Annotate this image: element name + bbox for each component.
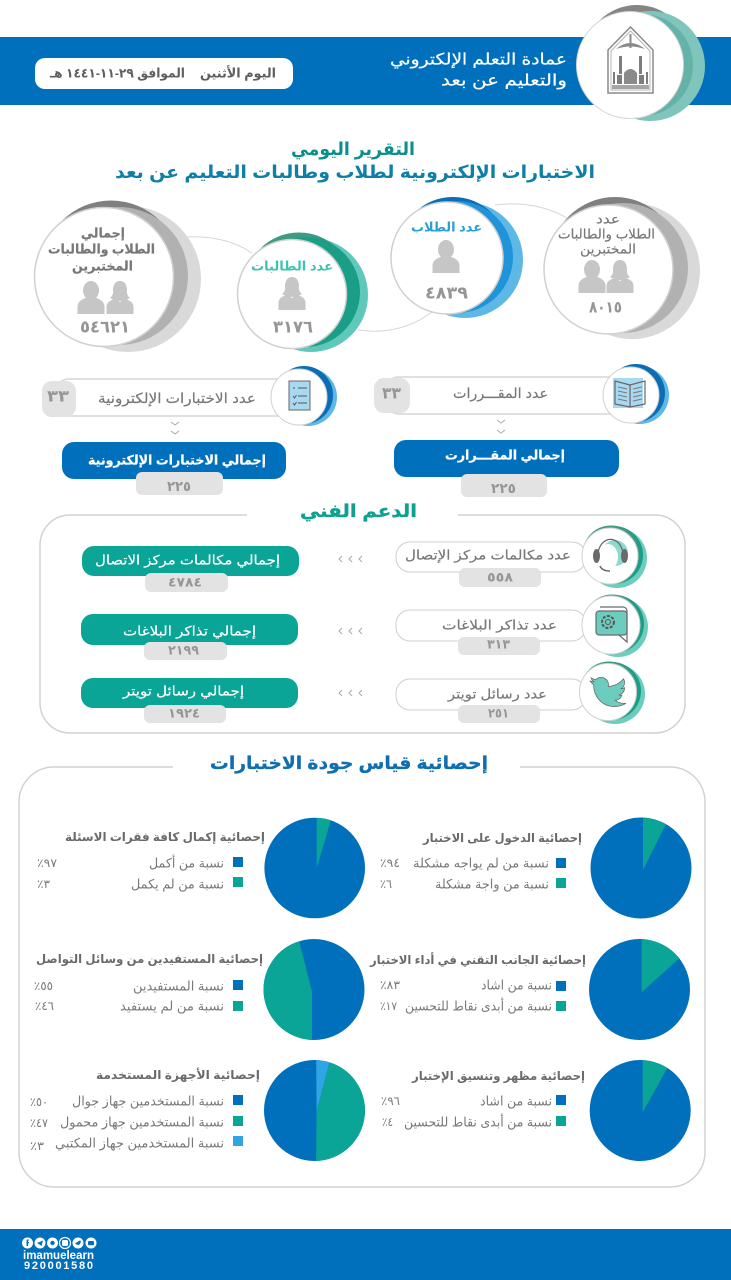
chart: exam appearance: ٤٪	[382, 1115, 393, 1129]
panel: exam quality statistics	[19, 767, 715, 1187]
chart: exam appearance: ٩٦٪	[381, 1094, 400, 1108]
circle: total students tested: الطلاب والطالبات	[48, 242, 155, 256]
chart: exam appearance: نسبة من أبدى نقاط للتحسين	[404, 1114, 552, 1130]
chart: question completion: إحصائية إكمال كافة فقرات الاسئلة	[65, 830, 265, 844]
circle: students tested	[544, 197, 700, 339]
chart: question completion: نسبة من أكمل	[149, 854, 224, 872]
row: tickets: ٣١٣	[487, 636, 510, 652]
chevrons	[339, 628, 362, 634]
date pill: اليوم الأثنين	[200, 64, 276, 82]
chart: devices used: ٤٧٪	[30, 1116, 49, 1130]
chart: devices used	[30, 1060, 365, 1161]
chart: question completion: ٣٪	[37, 877, 51, 891]
chart: question completion: نسبة من لم يكمل	[131, 876, 224, 892]
chart: technical aspect	[370, 939, 690, 1040]
chart: exam login: ٦٪	[380, 877, 392, 891]
chart: exam login: إحصائية الدخول على الاختبار	[422, 831, 582, 846]
heading: exam quality statistics: إحصائية قياس جودة الاختبارات	[210, 753, 488, 774]
chart: technical aspect: نسبة من أبدى نقاط للتحسين	[405, 998, 552, 1014]
chart: devices used: ٣٪	[30, 1139, 45, 1153]
report title: التقرير اليومي	[291, 139, 415, 160]
icon: open book	[603, 364, 669, 424]
chart: exam login: نسبة من واجة مشكلة	[435, 876, 549, 892]
chart: technical aspect: ١٧٪	[380, 999, 397, 1013]
chart: exam appearance: نسبة من اشاد	[480, 1094, 552, 1110]
total: tickets: إجمالي تذاكر البلاغات	[123, 624, 256, 640]
stat: e-exams	[42, 366, 337, 495]
circle: total students tested: المختبرين	[72, 258, 133, 274]
chart: social media beneficiaries: نسبة المستفيدين	[133, 978, 224, 994]
chevrons	[497, 420, 505, 433]
chart: devices used: نسبة المستخدمين جهاز محمول	[60, 1114, 224, 1130]
chart: devices used: نسبة المستخدمين جهاز المكتبي	[55, 1136, 224, 1152]
stat: courses	[374, 364, 669, 497]
date pill	[35, 58, 293, 89]
total: twitter: ١٩٢٤	[168, 706, 200, 720]
circle: total students tested: ٥٤٦٢١	[80, 318, 130, 336]
icon: twitter bird	[580, 662, 645, 724]
circle: male students: عدد الطلاب	[411, 220, 482, 234]
icon: checklist	[271, 366, 337, 426]
circle: students tested: الطلاب والطالبات	[558, 226, 655, 242]
chevrons	[339, 690, 362, 696]
chart: exam appearance: إحصائية مظهر وتنسيق الإختبار	[411, 1069, 585, 1084]
row: twitter: عدد رسائل تويتر	[447, 686, 547, 702]
total: twitter: إجمالي رسائل تويتر	[122, 684, 244, 700]
chevrons	[171, 422, 179, 434]
footer	[0, 1229, 731, 1280]
chart: exam login	[380, 818, 692, 918]
total: twitter	[81, 678, 298, 723]
chart: social media beneficiaries: ٤٦٪	[35, 999, 54, 1013]
chevrons	[339, 556, 362, 562]
chart: exam appearance	[382, 1060, 691, 1161]
row: twitter	[81, 662, 645, 724]
circle: students tested: عدد	[596, 212, 620, 226]
circle: female students: عدد الطالبات	[251, 258, 333, 274]
chart: exam login: نسبة من لم يواجه مشكلة	[413, 856, 549, 872]
stat: e-exams: عدد الاختبارات الإلكترونية	[98, 390, 256, 407]
chart: social media beneficiaries: نسبة من لم يستفيد	[120, 998, 224, 1014]
total: call center: إجمالي مكالمات مركز الاتصال	[95, 552, 280, 568]
logo badge	[576, 5, 705, 121]
chart: technical aspect: إحصائية الجانب التقني في أداء الاختبار	[369, 952, 586, 967]
stat: e-exams: إجمالي الاختبارات الإلكترونية	[88, 452, 266, 468]
chart: question completion: ٩٧٪	[37, 856, 58, 870]
chart: technical aspect: ٨٣٪	[380, 978, 401, 992]
stat: courses: عدد المقـــررات	[453, 385, 548, 402]
panel: technical support	[40, 515, 685, 733]
chart: exam login: ٩٤٪	[380, 856, 400, 870]
social icons	[22, 1238, 96, 1248]
row: tickets	[81, 594, 648, 660]
stat: courses: ٣٣	[382, 386, 401, 402]
stat: e-exams: ٢٢٥	[167, 478, 191, 494]
chart: question completion	[38, 818, 365, 918]
header title: والتعليم عن بعد	[441, 72, 567, 90]
footer phone: 920001580	[24, 1260, 93, 1272]
stat: e-exams: ٣٣	[47, 388, 69, 406]
header title: عمادة التعلم الإلكتروني	[390, 52, 567, 70]
row: call center: عدد مكالمات مركز الإتصال	[405, 548, 571, 564]
total: tickets	[81, 614, 298, 660]
chart: devices used: إحصائية الأجهزة المستخدمة	[96, 1067, 260, 1082]
total: call center: ٤٧٨٤	[168, 574, 202, 590]
circle: students tested: المختبرين	[580, 242, 636, 258]
row: call center: ٥٥٨	[487, 570, 513, 584]
header band	[0, 5, 731, 121]
stat: courses: ٢٢٥	[491, 480, 516, 496]
circle: male students: ٤٨٣٩	[425, 284, 469, 302]
stat: courses: إجمالي المقـــرارت	[445, 448, 565, 462]
report title: الاختبارات الإلكترونية لطلاب وطالبات التعليم عن بعد	[115, 162, 595, 183]
footer handle: imamuelearn	[23, 1248, 94, 1262]
circle: total students tested: إجمالي	[81, 226, 125, 240]
report title	[115, 139, 595, 183]
circle: female students	[238, 232, 368, 352]
circle: students tested: ٨٠١٥	[589, 300, 622, 316]
chart: social media beneficiaries	[34, 939, 364, 1040]
circle: male students	[391, 197, 523, 318]
circle: female students: ٣١٧٦	[273, 318, 313, 336]
icon: headset	[582, 526, 647, 588]
circle: total students tested	[34, 200, 201, 352]
connector lines	[185, 204, 567, 331]
row: call center	[82, 526, 647, 592]
chart: social media beneficiaries: ٥٥٪	[34, 979, 53, 993]
total: call center	[82, 546, 299, 592]
chart: technical aspect: نسبة من اشاد	[481, 978, 552, 994]
heading: technical support: الدعم الفني	[300, 501, 417, 522]
row: tickets: عدد تذاكر البلاغات	[442, 618, 557, 634]
date pill: الموافق ٢٩-١١-١٤٤١ هـ	[49, 66, 185, 80]
chart: devices used: ٥٠٪	[30, 1095, 48, 1109]
total: tickets: ٢١٩٩	[168, 642, 199, 658]
header title	[390, 52, 567, 90]
icon: chat gear	[582, 594, 648, 657]
chart: social media beneficiaries: إحصائية المستفيدين من وسائل التواصل	[36, 952, 263, 967]
chart: devices used: نسبة المستخدمين جهاز جوال	[72, 1094, 224, 1110]
row: twitter: ٢٥١	[488, 706, 509, 720]
